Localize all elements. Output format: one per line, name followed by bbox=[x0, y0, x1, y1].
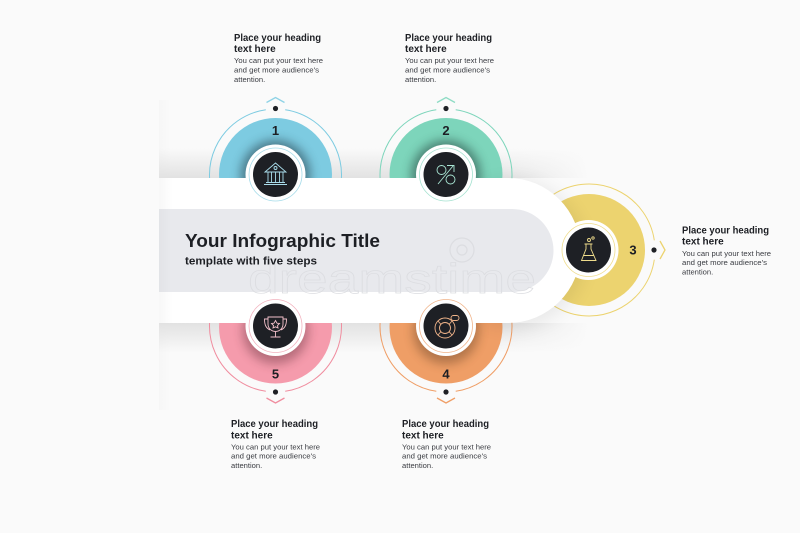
text block 3: text here bbox=[682, 236, 724, 248]
text block 2: Place your heading bbox=[405, 33, 492, 44]
band shadow bbox=[159, 148, 589, 353]
text block 5: text here bbox=[231, 430, 273, 442]
text block 3: attention. bbox=[682, 268, 713, 276]
step numbers: 2 bbox=[442, 123, 450, 138]
icon: percent arrow bbox=[437, 166, 455, 184]
text block 5 bbox=[231, 419, 320, 470]
step 5 half disc bbox=[209, 323, 342, 392]
watermark: dreamstime bbox=[248, 255, 536, 302]
text block 5: Place your heading bbox=[231, 419, 318, 430]
text block 5: You can put your text here bbox=[231, 442, 320, 452]
text block 1: text here bbox=[234, 44, 276, 55]
text block 4: text here bbox=[402, 430, 444, 442]
step 4 badge bbox=[416, 296, 476, 356]
text block 3: You can put your text here bbox=[682, 249, 771, 258]
step 3 badge bbox=[558, 220, 618, 280]
step 2 badge bbox=[416, 144, 476, 204]
step numbers: 1 bbox=[272, 123, 279, 138]
text block 3: Place your heading bbox=[682, 226, 769, 236]
subtitle: template with five steps bbox=[185, 256, 317, 268]
text block 1: You can put your text here bbox=[234, 56, 323, 65]
text block 4: attention. bbox=[402, 461, 433, 470]
text block 1: attention. bbox=[234, 75, 265, 84]
step 2 half disc bbox=[380, 109, 512, 178]
icon: lifebuoy bbox=[435, 316, 459, 338]
icon: flask bbox=[582, 237, 596, 260]
text block 5: attention. bbox=[231, 461, 262, 470]
grey title panel bbox=[159, 209, 554, 292]
text block 1: Place your heading bbox=[234, 33, 321, 44]
step 5 badge bbox=[246, 296, 306, 356]
step 1 half disc bbox=[209, 109, 342, 178]
step numbers bbox=[272, 123, 637, 382]
text block 2: and get more audience's bbox=[405, 66, 490, 74]
step 3 half disc bbox=[523, 184, 654, 316]
step numbers: 5 bbox=[272, 366, 279, 382]
white central band bbox=[159, 178, 586, 328]
text block 4: and get more audience's bbox=[402, 452, 487, 460]
marker dots bbox=[273, 106, 657, 395]
text block 4: Place your heading bbox=[402, 419, 489, 430]
text block 3 bbox=[682, 226, 771, 276]
text block 2: text here bbox=[405, 44, 447, 55]
step 1 badge bbox=[246, 144, 306, 204]
text block 5: and get more audience's bbox=[231, 452, 316, 460]
text block 2 bbox=[405, 33, 494, 84]
text block 2: attention. bbox=[405, 75, 436, 84]
chevron arrows bbox=[266, 98, 665, 403]
title: Your Infographic Title bbox=[185, 230, 380, 251]
step numbers: 3 bbox=[629, 242, 637, 258]
icon: trophy bbox=[264, 317, 286, 337]
text block 4 bbox=[402, 419, 491, 470]
text block 1: and get more audience's bbox=[234, 66, 319, 74]
watermark bbox=[248, 238, 536, 302]
text block 3: and get more audience's bbox=[682, 258, 767, 267]
step numbers: 4 bbox=[442, 366, 450, 382]
step 4 half disc bbox=[380, 322, 512, 392]
text block 2: You can put your text here bbox=[405, 56, 494, 65]
text block 4: You can put your text here bbox=[402, 442, 491, 452]
icon: bank bbox=[264, 163, 287, 184]
text block 1 bbox=[234, 33, 323, 84]
